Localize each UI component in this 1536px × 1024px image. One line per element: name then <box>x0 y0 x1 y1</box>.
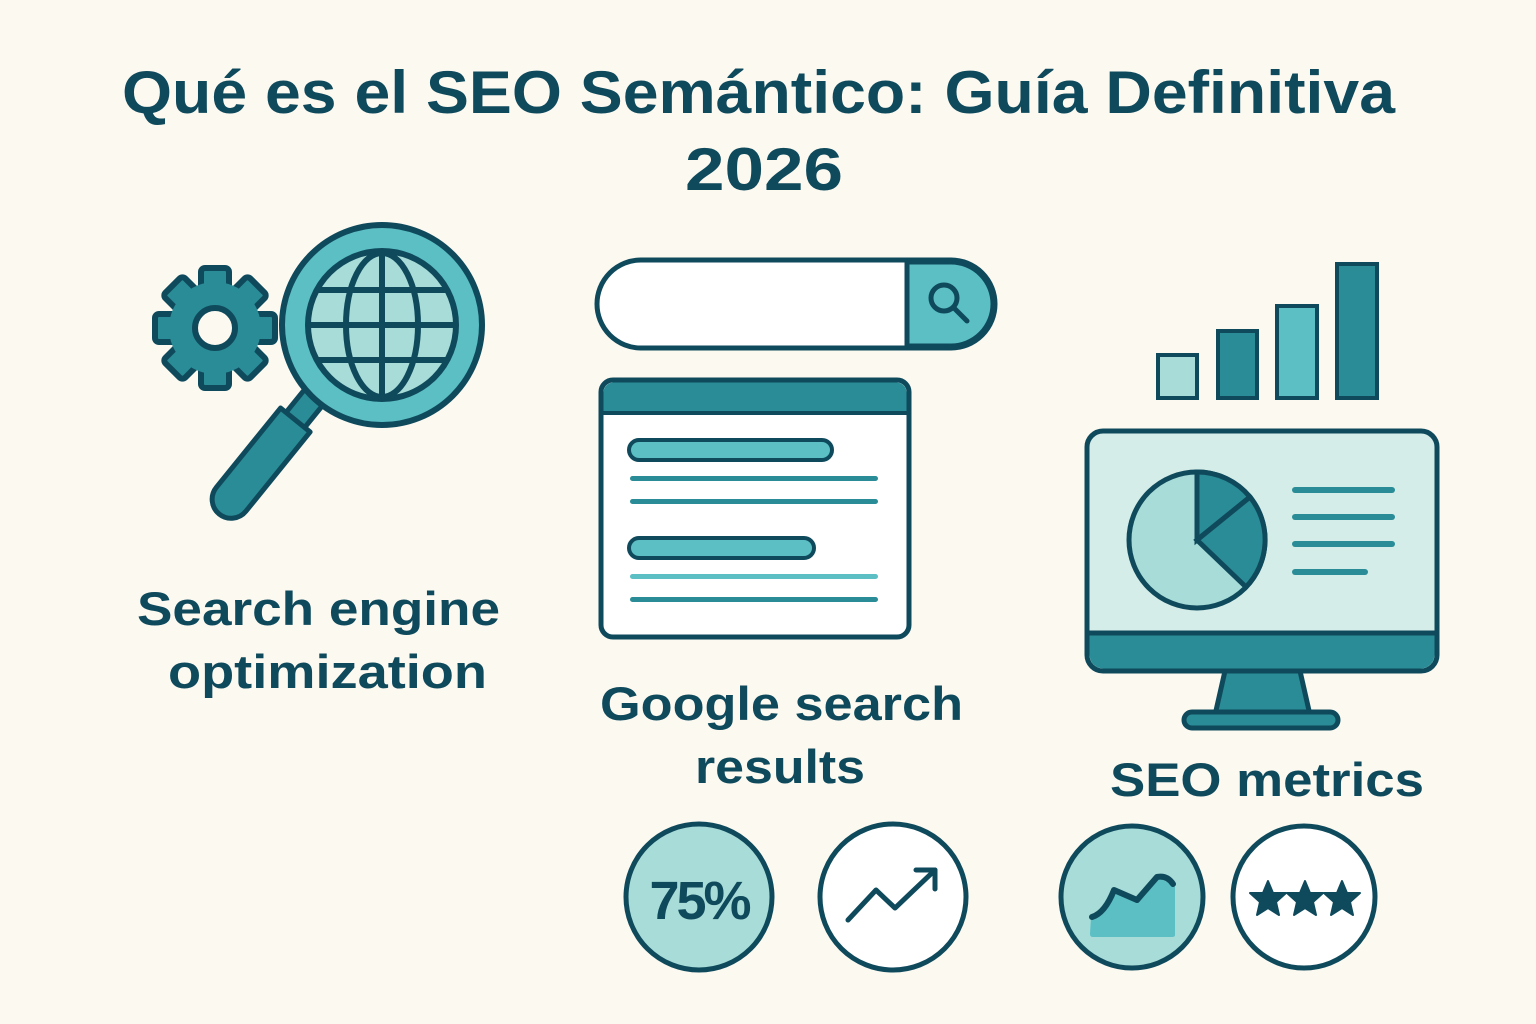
icon: 75% circle <box>626 824 772 970</box>
title <box>122 59 1396 203</box>
icon: stars circle <box>1233 826 1375 968</box>
text: google search results: results <box>695 740 865 793</box>
title: 2026 <box>685 136 843 203</box>
bar chart <box>1158 264 1377 398</box>
title: Qué es el SEO Semántico: Guía Definitiva <box>122 59 1396 126</box>
text: google search results: Google search <box>600 677 963 730</box>
text: search engine optimization: Search engine <box>137 582 500 635</box>
icon: search results window <box>601 380 909 637</box>
icon: trend arrow circle <box>820 824 966 970</box>
icon: gear and magnifier globe <box>155 225 482 526</box>
text: google search results <box>600 677 963 793</box>
icon: search bar <box>597 260 995 348</box>
pie chart <box>1129 472 1265 608</box>
icon: magnifier <box>204 225 482 526</box>
text: search engine optimization <box>137 582 500 698</box>
icon: area chart circle <box>1061 826 1203 968</box>
text: search engine optimization: optimization <box>168 645 487 698</box>
icon: gear <box>155 268 275 388</box>
text: seo metrics: SEO metrics <box>1110 753 1424 806</box>
icon: monitor dashboard <box>1087 431 1437 728</box>
icon: 75% circle: 75% <box>649 871 751 931</box>
